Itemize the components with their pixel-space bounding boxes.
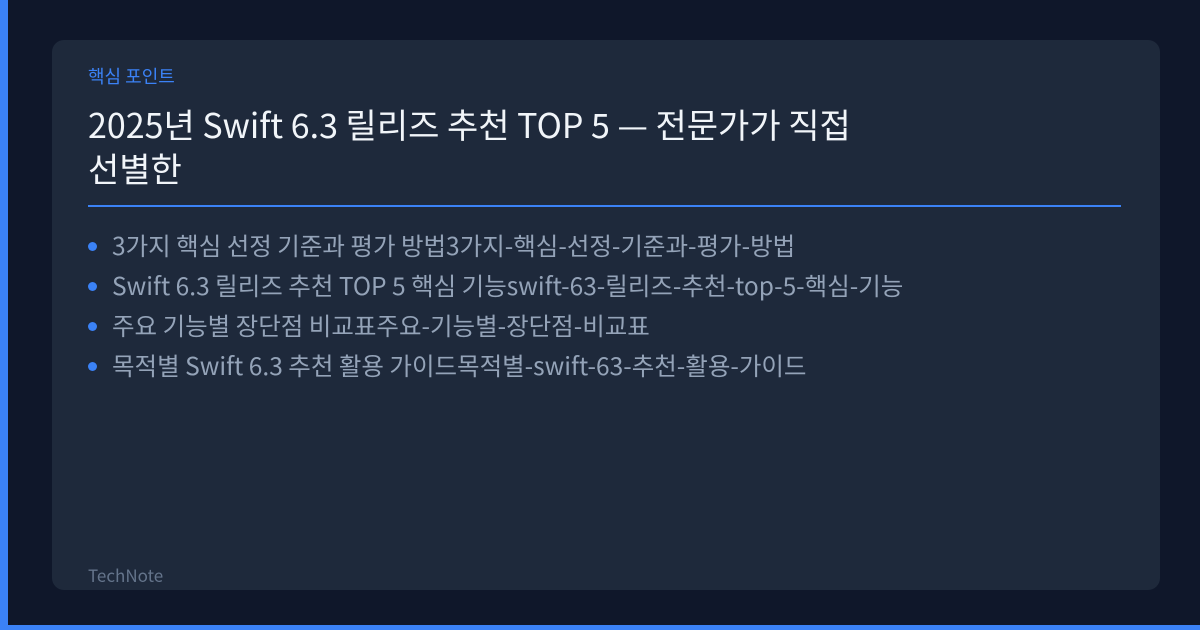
bullet 2: Swift 6.3 릴리즈 추천 TOP 5 핵심 기능swift-63-릴리즈-추천-top-5-핵심-기능: [112, 268, 903, 303]
bullet 4: 목적별 Swift 6.3 추천 활용 가이드목적별-swift-63-추천-활용-가이드: [112, 348, 806, 383]
bullet 3: 주요 기능별 장단점 비교표주요-기능별-장단점-비교표: [112, 308, 650, 343]
footer brand: TechNote: [88, 562, 163, 587]
bullet list: [88, 228, 903, 383]
bullet 1: 3가지 핵심 선정 기준과 평가 방법3가지-핵심-선정-기준과-평가-방법: [112, 228, 795, 263]
label: 핵심 포인트: [88, 63, 175, 89]
title: 2025년 Swift 6.3 릴리즈 추천 TOP 5 — 전문가가 직접 선별한: [88, 99, 851, 192]
